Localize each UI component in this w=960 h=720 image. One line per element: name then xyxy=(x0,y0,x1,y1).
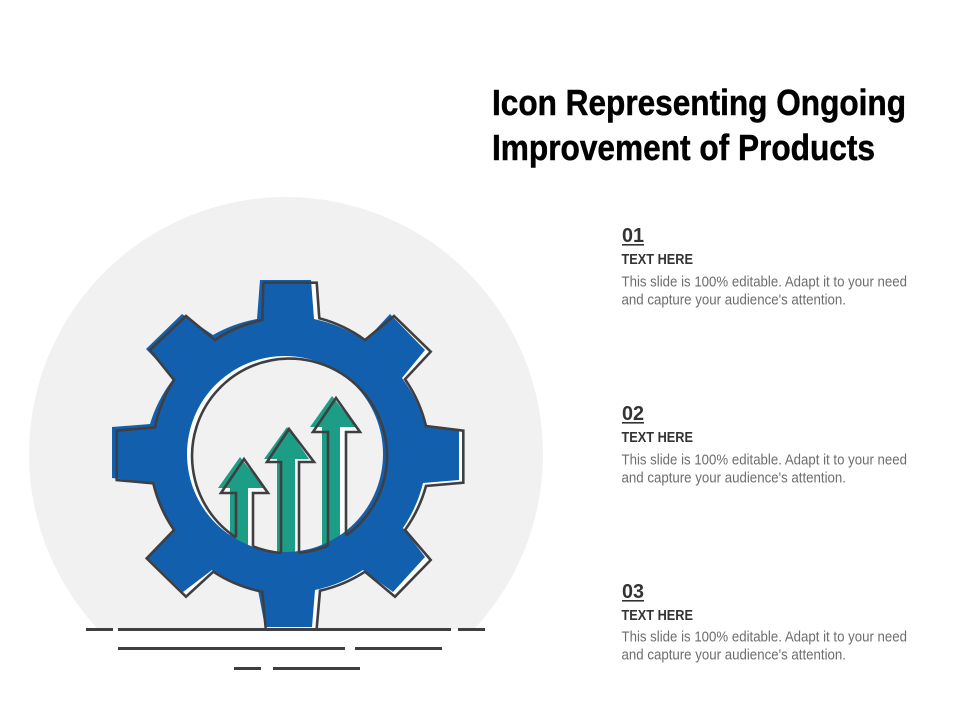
text block 02: TEXT HERE xyxy=(622,430,693,446)
text block 01 xyxy=(622,225,907,308)
text block 01: TEXT HERE xyxy=(622,252,693,268)
text block 03 xyxy=(622,581,907,664)
placeholder caption lines xyxy=(86,628,485,670)
background circle xyxy=(29,197,543,629)
text block 01: and capture your audience's attention. xyxy=(622,292,846,308)
teal arrows xyxy=(218,396,356,560)
icon: gear with rising arrows xyxy=(112,280,463,628)
text block 03: 03 xyxy=(622,581,644,603)
text block 02: This slide is 100% editable. Adapt it to your need xyxy=(622,452,907,468)
white arrow backings xyxy=(221,398,360,560)
text block 01: 01 xyxy=(622,225,644,247)
text block 03: This slide is 100% editable. Adapt it to your need xyxy=(622,628,907,646)
text block 02: and capture your audience's attention. xyxy=(622,470,846,486)
title: Icon Representing Ongoing xyxy=(492,82,906,123)
text block 01: This slide is 100% editable. Adapt it to your need xyxy=(622,274,907,290)
infographic canvas xyxy=(29,88,906,670)
text block 02 xyxy=(622,403,907,486)
inner ring outline xyxy=(192,359,387,553)
gear inner disc xyxy=(192,358,387,554)
text block 02: 02 xyxy=(622,403,644,425)
title: Improvement of Products xyxy=(492,127,875,168)
text block 03: and capture your audience's attention. xyxy=(622,646,846,664)
text block 03: TEXT HERE xyxy=(622,608,693,624)
title xyxy=(492,82,906,168)
gear white offset shadow xyxy=(117,283,463,628)
blue gear xyxy=(112,280,459,627)
arrow outlines xyxy=(221,398,360,553)
gear outline xyxy=(117,283,463,628)
